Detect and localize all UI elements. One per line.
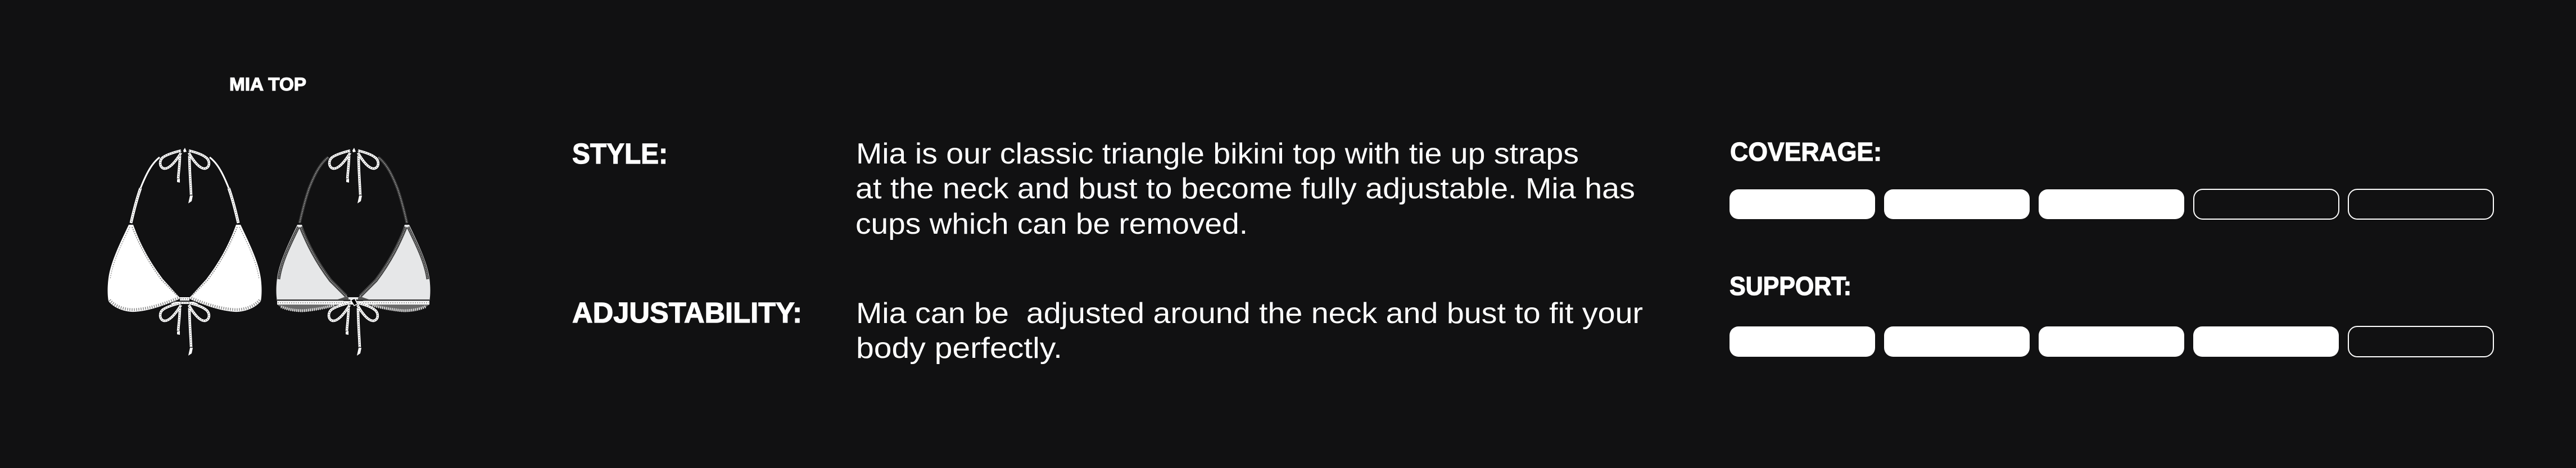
icon: bikini top front view [108, 148, 262, 356]
heading: COVERAGE: COVERAGE: [1730, 137, 1882, 166]
text block: style description: at the neck and bust to become fully adjustable. Mia has [855, 172, 1635, 205]
icon: bikini top back view [277, 148, 431, 356]
rating bar: coverage 3 of 5 [1730, 189, 2493, 219]
text block: adjustability description: Mia can be adjusted around the neck and bust to fit your [856, 297, 1643, 330]
rating bar: support 4 of 5 [1730, 326, 2493, 357]
heading: ADJUSTABILITY: ADJUSTABILITY: [572, 297, 802, 329]
heading: SUPPORT: SUPPORT: [1730, 271, 1851, 301]
text block: style description: cups which can be removed. [855, 208, 1248, 240]
title: MIA TOP: MIA TOP [229, 74, 306, 94]
text block: adjustability description: body perfectly. [856, 332, 1062, 365]
text block: adjustability description [856, 297, 1643, 365]
text block: style description: Mia is our classic triangle bikini top with tie up straps [856, 138, 1579, 170]
text block: style description [855, 138, 1635, 240]
heading: STYLE: STYLE: [572, 138, 668, 170]
